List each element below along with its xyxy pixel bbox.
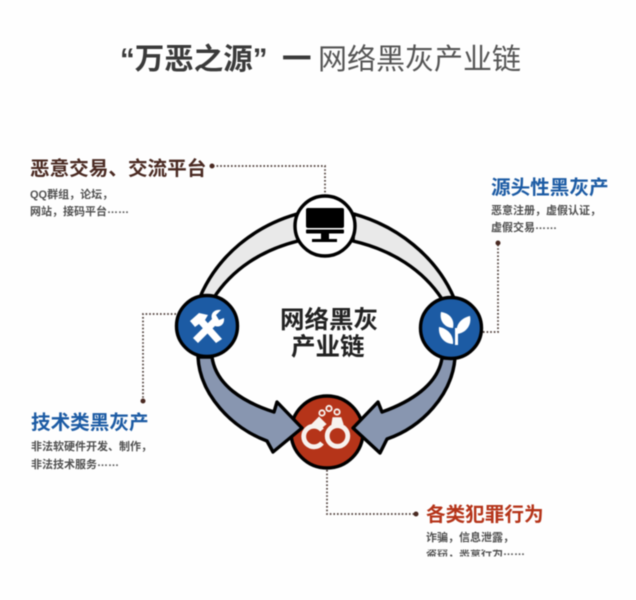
callout: source: 恶意注册，虚假认证， [491, 203, 601, 217]
callout: source: 源头性黑灰产 [491, 177, 609, 199]
connector: tech label to tools [143, 314, 176, 401]
connector: trading label to monitor [213, 166, 325, 195]
node: tools [176, 296, 238, 356]
node: sprout [420, 298, 482, 358]
arc: top left [200, 214, 298, 299]
center label: 网络黑灰 [280, 306, 378, 334]
icon: handcuffs [304, 406, 348, 447]
callout: trading platforms: QQ群组，论坛， [30, 187, 113, 201]
node: monitor [295, 196, 355, 256]
callout: crime [414, 503, 544, 562]
title: 网络黑灰产业链 [318, 43, 521, 76]
callout: trading platforms: …… [107, 204, 129, 216]
callout: trading platforms [30, 157, 214, 218]
arrow: sprout to crime [353, 358, 455, 453]
icon: hammer and wrench [190, 310, 224, 343]
title: “万恶之源” [120, 43, 268, 76]
title: 一 [282, 43, 312, 76]
title [120, 43, 521, 76]
callout: source: …… [535, 220, 557, 232]
callout: tech [31, 398, 152, 471]
callout: source [491, 177, 609, 246]
callout: crime: 盗窃，恶意行为 [426, 548, 503, 560]
connector: source label to sprout [483, 243, 498, 332]
callout: trading platforms: 恶意交易、交流平台 [30, 157, 206, 180]
center label: 产业链 [291, 333, 364, 361]
callout: crime: 各类犯罪行为 [426, 503, 544, 526]
node: crime circle [291, 396, 363, 468]
callout: crime: 诈骗，信息泄露， [426, 530, 514, 544]
arrow: tools to crime [198, 357, 302, 452]
callout: source: 虚假交易 [491, 222, 535, 234]
icon: sprout [439, 312, 470, 345]
callout: tech: …… [97, 457, 119, 469]
callout: crime: …… [503, 546, 525, 558]
callout: tech: 非法技术服务 [31, 459, 97, 471]
icon: monitor [306, 208, 344, 242]
arc: top right [353, 214, 454, 299]
callout: tech: 技术类黑灰产 [31, 412, 149, 434]
callout: tech: 非法软硬件开发、制作， [31, 439, 152, 453]
callout: trading platforms: 网站，接码平台 [30, 206, 107, 218]
connector: crime label to handcuffs [327, 470, 416, 514]
center label [280, 306, 378, 361]
